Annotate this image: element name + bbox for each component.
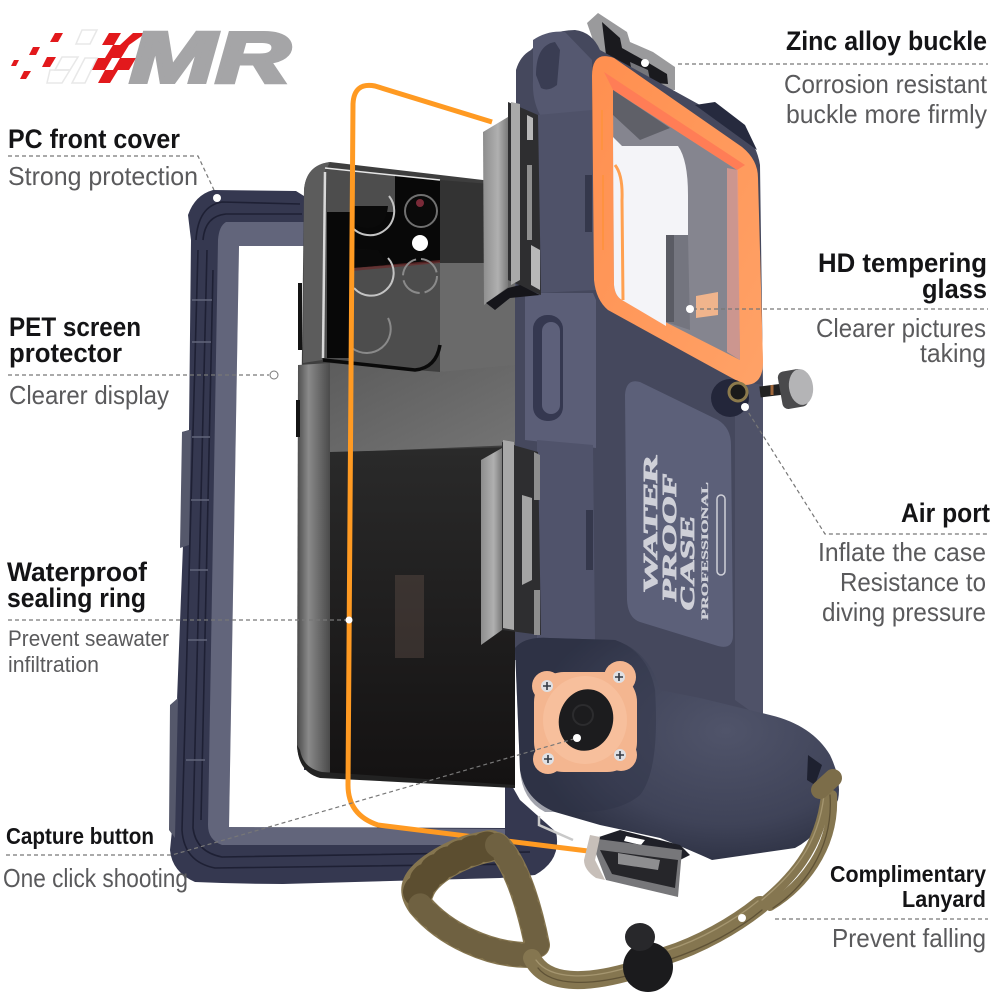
callout: Capture button: Capture button <box>6 823 154 849</box>
callout: PET screen protector: PET screen <box>9 312 141 342</box>
camera module <box>323 168 440 370</box>
bottom buckle <box>539 816 690 897</box>
callout: Waterproof sealing ring: infiltration <box>8 652 99 677</box>
hinge: upper <box>483 102 541 310</box>
callout: Complimentary Lanyard <box>738 861 988 953</box>
top buckle <box>587 13 675 90</box>
cord stopper bead <box>623 923 673 992</box>
logo: MR racing mark: MR <box>130 19 290 98</box>
panel: label plate <box>625 381 733 647</box>
panel: PC front cover frame <box>169 190 557 884</box>
callout: PC front cover: PC front cover <box>8 124 180 154</box>
callout: Zinc alloy buckle: Corrosion resistant <box>784 69 988 99</box>
logo: MR racing mark <box>11 19 290 98</box>
callout: HD tempering glass: Clearer pictures <box>816 313 986 343</box>
callout: Waterproof sealing ring: Prevent seawater <box>8 626 169 651</box>
callout: HD tempering glass <box>686 248 988 368</box>
callout: Air port: Inflate the case <box>818 537 986 567</box>
callout: HD tempering glass: glass <box>922 274 987 304</box>
callout: Capture button: One click shooting <box>3 863 188 893</box>
callout: Waterproof sealing ring <box>7 557 352 677</box>
callout: Air port: Resistance to <box>840 567 986 597</box>
loop <box>414 844 537 955</box>
label text: PROFESSIONAL <box>700 482 710 620</box>
callout: HD tempering glass: taking <box>920 338 986 368</box>
panel: rear case body <box>515 30 763 720</box>
cord <box>532 778 833 982</box>
callout: PC front cover: Strong protection <box>8 161 198 191</box>
callout: Complimentary Lanyard: Complimentary <box>830 861 986 887</box>
orange sealing gasket <box>348 85 588 851</box>
panel: orange window gasket and glass <box>592 56 763 385</box>
thumb screw <box>760 368 815 410</box>
callout: PET screen protector: protector <box>9 338 122 368</box>
air port valve <box>711 368 815 417</box>
callout: PC front cover <box>8 124 221 202</box>
hinge: lower <box>481 440 541 645</box>
callout: HD tempering glass: HD tempering <box>818 248 987 278</box>
callout: PET screen protector: Clearer display <box>9 380 169 410</box>
callout: Air port: diving pressure <box>822 597 986 627</box>
callout: Zinc alloy buckle: Zinc alloy buckle <box>786 26 987 56</box>
capture button plate <box>532 661 637 774</box>
callout: Zinc alloy buckle: buckle more firmly <box>786 99 987 129</box>
callout: Zinc alloy buckle <box>641 26 988 129</box>
phone <box>296 162 515 788</box>
callout: Capture button <box>3 734 581 893</box>
callout: Air port: Air port <box>901 498 990 528</box>
callout: Complimentary Lanyard: Lanyard <box>902 886 986 912</box>
label text: WATER <box>640 452 662 595</box>
lanyard <box>414 778 833 992</box>
callout: PET screen protector <box>8 312 278 410</box>
label text: PROOF <box>659 472 681 603</box>
label text <box>640 452 710 620</box>
callout: Waterproof sealing ring: sealing ring <box>7 583 146 613</box>
callout: Waterproof sealing ring: Waterproof <box>7 557 148 587</box>
callout: Air port <box>741 403 990 627</box>
panel: grip handle <box>515 638 839 860</box>
callout: Complimentary Lanyard: Prevent falling <box>832 923 986 953</box>
label text: CASE <box>677 514 699 613</box>
